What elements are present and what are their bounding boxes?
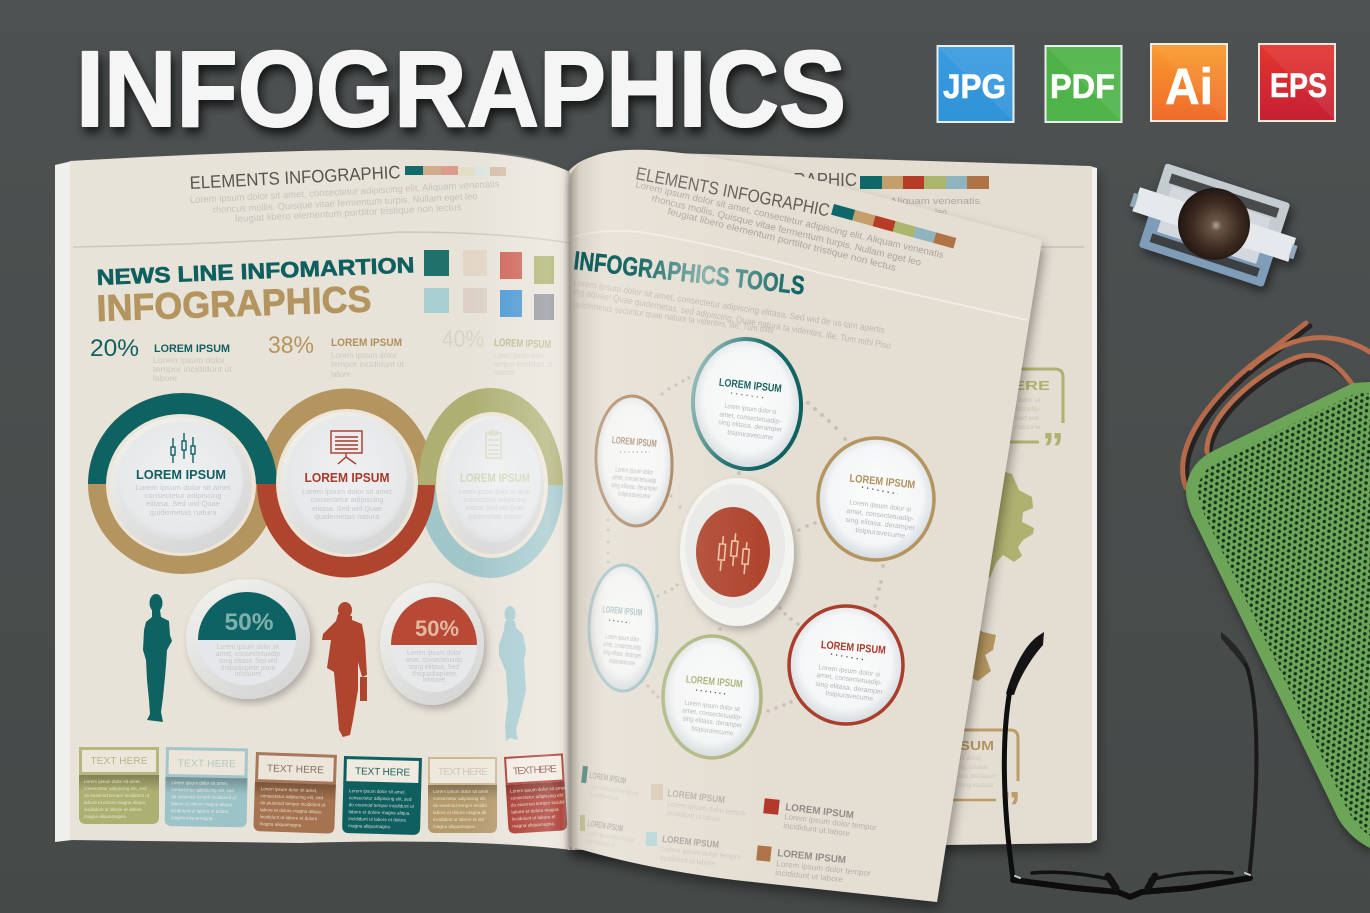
gauge: teal 50%: song elitasa. Sed wid [219,658,277,665]
legend: tan: incididunt ut labore [667,810,721,824]
front page intro text: Lorem ipsum dolor sit amet, consectetur adipiscing elit. Aliquam venenatis [634,179,945,261]
front page body text: Lorem ipsum dolor sit amet, consectetur adipiscing elitasa. Sed wid de us tam apertis [573,277,886,335]
circle 1 [106,414,256,556]
text box 6: red: do eiusmod tempor incidid [511,799,565,808]
bubble: tan right: LOREM IPSUM [849,473,916,491]
circle 2: quidemetas natura [314,514,380,521]
text box 6: red: labore et dolore magna [511,807,559,815]
stat: 38%: LOREM IPSUM [331,337,402,349]
badge: EPS [1259,44,1335,121]
bubble: red right: sing elitasa. deramper [815,681,884,696]
gauge: teal 50%: 50% [224,609,274,636]
clip object with wooden ball [1119,157,1309,293]
book: left page [70,150,572,850]
bubble: green bottom: tisipiuravecume [691,725,734,738]
text box 5: tan: do eiusmod tempor incidid [433,803,487,808]
back page: heading fragment and colour bar: leo [935,207,947,217]
back page: olive quote box: Sed wid [1015,415,1039,422]
legend: brown: Lorem ipsum dolor tempor [776,859,872,878]
text box 6: red [504,754,569,834]
legend: teal: LOREM IPSUM [589,770,627,786]
circle 1: Lorem ipsum dolor sit amet [136,485,231,492]
legend: blue: incididunt ut labore [660,855,715,868]
title: INFOGRAPHICS [76,28,846,149]
bubble: tan right: sing elitasa. deramper [845,517,916,532]
circle 3: consectetur adipiscing [464,497,526,504]
legend: tan [651,784,748,824]
back page: tan quote box: inequisatum [958,782,993,789]
text box 5: tan: labore et dolore magna ali [433,810,486,815]
front page intro text: feugiat libero elementum porttitor tristique non lectus [666,206,897,274]
stat: 40%: labore [494,368,516,377]
stat: 20%: LOREM IPSUM [154,343,230,355]
text box 1: olive: consectetur adipiscing elit, sed [84,786,147,791]
gauge: red 50%: 50% [415,616,459,641]
legend: blue: LOREM IPSUM [662,834,720,851]
stat: 38%: tempor incididunt ut [331,360,405,369]
legend: red: Lorem ipsum dolor tempor [784,812,877,832]
circle 2: LOREM IPSUM [304,470,390,485]
gauge: teal 50%: Lorem ipsum dolor sit [217,644,279,651]
legend: teal [581,766,640,803]
circle 2 [276,409,418,557]
bubble: green bottom: Lorem ipsum dolor sit [684,700,740,713]
text box 3: brown: magna aliquamagna. [259,821,302,828]
legend: teal: incididunt ut [589,791,620,803]
stat: 20% [90,335,233,383]
stat: 40%: Lorem ipsum dolor [494,351,544,360]
text box 3: brown: Lorem ipsum dolor sit amet, [261,786,317,793]
bubble: teal top: tisipiuravecume [727,429,774,442]
text box 1: olive: Lorem ipsum dolor sit amet, [84,779,141,784]
gauge: red 50% [380,583,484,705]
text box 4: teal: TEXT HERE [355,766,411,779]
text box 1: olive: magna aliquamagna. [84,814,127,819]
bubble: teal top: Lorem ipsum dolor si [724,403,777,416]
bubble: tan right: tisipiuravecume [855,527,906,540]
bubble: blue left: LOREM IPSUM [602,604,643,619]
icon: clipboard [486,431,501,458]
back page: heading fragment and colour bar [740,170,1084,248]
front page heading: ELEMENTS INFOGRAPHIC [634,163,831,221]
text box 5: tan: consectetur adipiscing elit [433,796,486,801]
bubble: blue left [589,565,657,691]
bubble: blue left: sing elitasa. deramper [603,649,642,660]
text box 2: blue [165,748,248,827]
gauge: teal 50% [186,579,310,699]
gauge: teal 50%: thiquidiapiete piura [221,665,275,672]
bubble: green bottom [663,636,761,758]
circle 3: quidemetas natura [468,514,523,521]
text box 2: blue: labore et dolore magna aliqua. [171,801,233,807]
bubble: brown left: amet, consectetuadip [612,474,656,485]
text box 4: teal: incididunt ut labore et dolore [348,816,407,823]
stat: 20%: tempor incididunt ut [153,365,233,374]
legend: red: LOREM IPSUM [785,802,854,821]
text box 4: teal: labore et dolore magna aliqua. [348,809,411,816]
back page: tan quote box [940,730,1021,832]
stat: 20%: labore [153,374,178,383]
back page: olive gear [975,472,1034,578]
heading: infographics tools: INFOGRAPHICS TOOLS [572,245,806,300]
stat: 38%: 38% [268,332,314,359]
text box 5: tan: incididunt ut labore et dol [433,817,484,822]
back page: tan quote box: ” [999,783,1021,832]
circle 3: Lorem ipsum dolor sit amet [459,489,531,496]
legend: olive: incididunt ut [587,838,616,849]
bubble: tan right: Lorem ipsum dolor si [849,499,912,514]
text box 4: teal: do eiusmod tempor incididunt ut [349,802,415,809]
text box 6: red: Lorem ipsum dolor sit amet, [510,785,567,794]
legend: blue: Lorem ipsum dolor tempor [661,846,742,861]
circle 3: LOREM IPSUM [460,471,530,485]
bubble: brown left: LOREM IPSUM [611,435,657,450]
format badges [938,44,1335,122]
bubble: blue left: tisipiuravecume [609,658,636,667]
stat: 38%: Lorem ipsum dolor [331,351,397,360]
back page: tan quote box: ass densaum [958,773,997,780]
left page intro text [190,179,500,225]
icon: sliders [717,532,751,574]
badge: Ai: Ai [1165,58,1213,115]
legend: tan: Lorem ipsum dolor tempor [667,801,748,818]
front page colour bar [831,204,956,249]
stat: 38% [268,332,405,379]
text box 5: tan [428,758,497,833]
legend: blue [646,832,742,868]
bubble: brown left: tisipiuravecume [618,491,650,500]
icon: presentation board [331,431,362,464]
left page colour bar [405,166,506,176]
stat: 20%: Lorem ipsum dolor [153,356,225,365]
legend: olive: Lorem ipsum dolor tempor [587,830,636,845]
silhouette: red man [322,602,367,737]
bubble: red right [789,606,903,724]
gauge: teal 50%: inhdunet [235,671,261,678]
bubble: blue left: Lorem ipsum dolor [605,633,640,644]
text box 2: blue: consectetur adipiscing elit, sed [171,787,234,793]
circle 1: quidemetas natura [150,510,217,517]
glasses [1004,632,1256,897]
text box 2: blue: TEXT HERE [178,758,236,770]
left page intro text: rhoncus mollis. Quisque vitae fermentum turpis. Nullam eget leo [213,191,478,216]
speaker [1186,382,1370,848]
circle 3 [436,412,548,558]
left page intro text: feugiat libero elementum porttitor tristique non lectus [235,202,462,225]
text box 4: teal: consectetur adipiscing elit, sed [349,795,412,802]
bubble: green bottom: LOREM IPSUM [685,674,743,690]
bubble: blue left: amet, consectetuadip [603,641,641,652]
circle 1: consectetur adipiscing [144,493,222,500]
text box 1: olive: incididunt ut labore et dolore [84,807,142,812]
stat: 40%: 40% [442,326,484,353]
circle 2: Lorem ipsum dolor sit amet [302,489,392,496]
text box 2: blue: magna aliquamagna. [171,815,214,821]
stat: 40%: tempor incididunt ut [494,360,553,369]
text box 3: brown: labore et dolore magna aliqua. [260,807,322,814]
text box 6: red: TEXT HERE [513,764,558,777]
legend: brown: incididunt ut labore [775,868,844,884]
stat: 40%: LOREM IPSUM [494,337,551,351]
bubble: green bottom: sing elitasa. deramper [682,715,743,730]
colour swatches [424,250,554,320]
text box 3: brown: TEXT HERE [267,763,324,776]
bubble: tan right [818,438,934,560]
back page: olive quote box: ” [1042,424,1064,473]
stat: 40% [442,326,553,377]
back page: olive quote box: sturadip- [1015,406,1040,413]
back page: tan quote box: ing elitasa [958,764,988,771]
bubble: brown left: Lorem ipsum dolor [615,466,654,477]
legend: red [763,798,877,838]
legend: olive [580,815,636,849]
stat: 38%: labore [331,370,350,379]
circle 2: elitasa. Sed wid Quae [312,506,382,513]
text box 1: olive: do eiusmod tempor incididunt ut [84,793,150,798]
left page heading: ELEMENTS INFOGRAPHIC [189,162,401,193]
front page body text: quidemetas secuntur quae natura ta videntes, ille. Tum mihi [573,299,774,335]
centre hub [680,478,794,626]
stat: 20%: 20% [90,335,139,362]
legend: teal: Lorem ipsum dolor tempor [589,783,640,798]
text box 2: blue: do eiusmod tempor incididunt ut [171,794,237,800]
back page: heading fragment and colour bar: INFOGRAPHIC [740,170,857,190]
badge: PDF [1046,46,1122,122]
badge: EPS: EPS [1270,67,1327,105]
text box 2: blue: incididunt ut labore et dolore [171,808,229,814]
bubble: teal top: LOREM IPSUM [718,377,782,395]
bubble: green bottom: amet, consectetuadip- [682,707,743,722]
silhouette: blue woman [499,606,526,741]
badge: Ai [1151,44,1227,121]
bubble: red right: tisipiuravecume [825,690,874,703]
gauge: red 50%: amet, consectetuadip [406,657,463,664]
legend items [580,766,877,884]
front page intro text: rhoncus mollis. Quisque vitae fermentum turpis. Nullam eget leo [650,193,922,269]
text box 5: tan: TEXT HERE [438,767,488,778]
text box 1: olive: labore et dolore magna aliqua. [84,800,146,805]
text box 6: red: incididunt ut labore et [512,814,556,822]
back page: tan quote box: IPSUM [945,738,994,753]
gauge: teal 50%: amet, consectetuadip [216,651,280,658]
leather straps [1183,323,1370,491]
bubble: tan right: amet, consectetuadip- [846,508,915,523]
silhouette: teal woman [143,594,172,722]
book: front right page [570,150,1042,902]
back page: olive quote box: natura te [1015,424,1041,431]
circle 2: consectetur adipiscing [310,497,384,504]
bubble: teal top: amet, consectetuadip- [719,411,782,426]
text box 5: tan: Lorem ipsum dolor sit amet [433,789,489,794]
legend: tan: LOREM IPSUM [667,788,726,806]
circle 1: LOREM IPSUM [136,467,226,482]
badge: JPG: JPG [943,68,1006,106]
text box 3: brown: do eiusmod tempor incididunt ut [260,800,326,807]
front page body text: ing aquae! Quae quidemetas, sed adipiscing. Quae natura ta videntes, ille. Tum mihi Piso [573,286,892,351]
bubble: teal top: sing elitasa. deramper [718,419,783,434]
text box 4: teal [342,757,422,835]
left page intro text: Lorem ipsum dolor sit amet, consectetur adipiscing elit. Aliquam venenatis [190,179,500,206]
text box 3: brown: incididunt ut labore et dolore [260,814,318,821]
book: back right page [568,152,1097,850]
text box 4: teal: Lorem ipsum dolor sit amet, [349,788,406,795]
back page: tan gear [965,628,996,681]
icon: sliders [171,433,195,463]
connector dots [606,376,885,714]
bubble: brown left: sing elitasa. deramper [611,482,658,493]
text box 4: teal: magna aliquamagna. [348,823,391,829]
gauge: red 50%: song elitasa. Sed [409,664,459,671]
front page spine shading [570,150,760,880]
badge: PDF: PDF [1050,68,1115,106]
text box 3: brown [253,753,337,834]
gauge: red 50%: thiquidiapiete [412,671,456,678]
circle 1: elitasa. Sed wid Quae [146,501,220,508]
text box 2: blue: Lorem ipsum dolor sit amet, [171,780,228,786]
text box 1: olive: TEXT HERE [90,756,148,767]
back page: olive quote box: dolor sit [1018,397,1041,404]
back page: tan quote box: sit amet, [958,755,983,762]
bubble: red right: Lorem ipsum dolor si [818,664,881,679]
legend: brown: LOREM IPSUM [777,848,846,866]
bubble: teal top [689,335,805,473]
bubble: brown left [593,394,675,528]
circle 3: elitasa. Sed wid Quae [466,505,524,512]
book: page stack edge left [55,161,72,842]
text box 1: olive [79,748,159,824]
back page: olive quote box: HERE [1000,378,1050,393]
bubble: red right: LOREM IPSUM [820,639,886,657]
legend: brown [756,845,872,884]
text box 6: red: magna aliquamagna. [512,821,555,829]
left page spine shading [470,151,572,850]
gauge: red 50%: inhdunet [423,677,445,684]
badge: JPG [938,46,1014,122]
text box 3: brown: consectetur adipiscing elit, sed [260,793,324,800]
back page: heading fragment and colour bar: Aliquam venenatis [890,196,981,206]
legend: olive: LOREM IPSUM [587,818,624,834]
headline: infographics: INFOGRAPHICS [96,278,372,329]
back page: olive quote box [990,369,1064,473]
legend: red: incididunt ut labore [783,821,851,838]
bubble: red right: amet, consectetuadip- [816,672,883,687]
text box 6: red: consectetur adipiscing elit [510,792,564,801]
ring charts [88,388,563,578]
text box 5: tan: magna aliquamagna. [433,824,476,829]
gauge: red 50%: Lorem ipsum dolor [407,650,462,657]
headline: news line: NEWS LINE INFOMARTION [96,252,415,290]
